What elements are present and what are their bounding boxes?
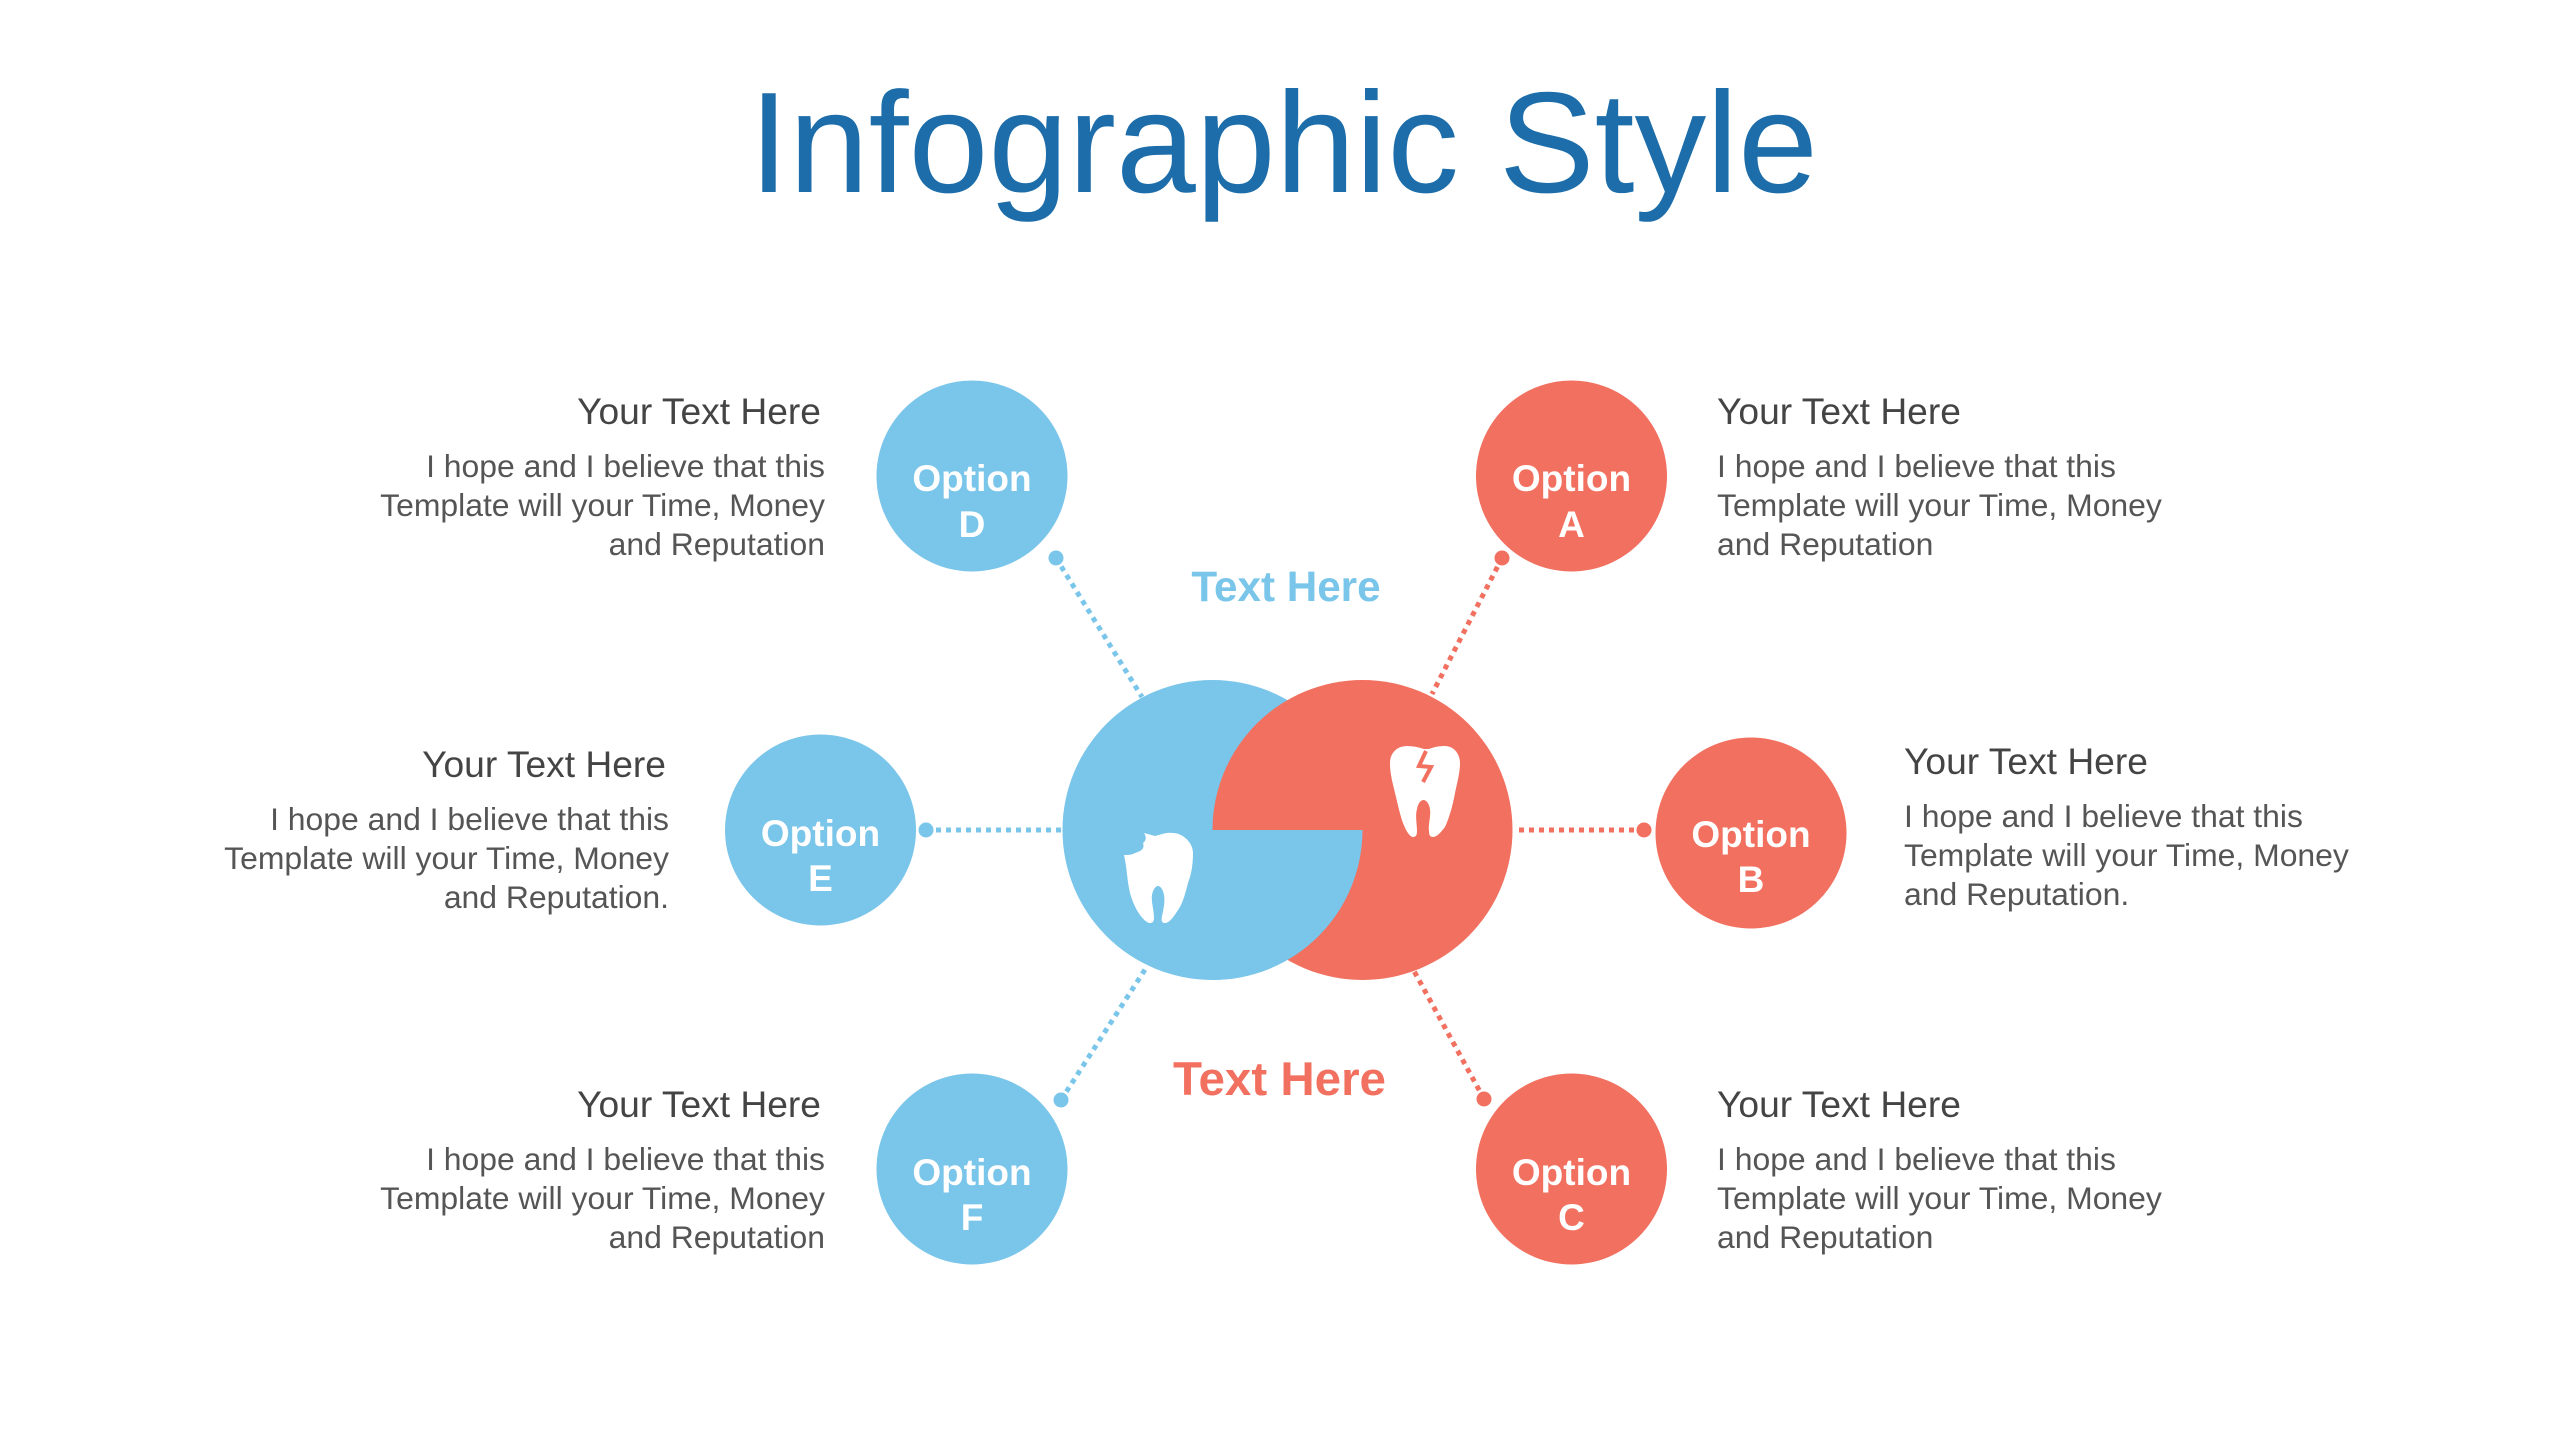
text block: option A: Template will your Time, Money <box>1717 487 2162 523</box>
text block: option B: Template will your Time, Money <box>1904 837 2349 873</box>
text block: option F: Your Text Here <box>577 1083 821 1125</box>
option F circle: Option <box>912 1152 1032 1193</box>
text block: option C: I hope and I believe that this <box>1717 1141 2116 1177</box>
option C circle <box>1476 1074 1667 1264</box>
text block: option F: I hope and I believe that this <box>426 1141 825 1177</box>
blue circle <box>1062 680 1362 980</box>
text block: option D: Template will your Time, Money <box>380 487 825 523</box>
option B circle: Option <box>1691 814 1811 855</box>
text block: option D: and Reputation <box>609 526 825 562</box>
option B circle: B <box>1738 859 1764 900</box>
label: blue text here: Text Here <box>1191 563 1381 610</box>
option B circle <box>1656 738 1846 928</box>
text block: option D <box>380 390 825 562</box>
option E circle <box>725 734 916 926</box>
text block: option C: Your Text Here <box>1717 1083 1961 1125</box>
option C circle: C <box>1558 1197 1585 1238</box>
option A circle: A <box>1558 504 1585 545</box>
text block: option A: and Reputation <box>1717 526 1933 562</box>
text block: option F: and Reputation <box>609 1219 825 1255</box>
text block: option E: I hope and I believe that this <box>270 801 669 837</box>
option D circle <box>876 380 1068 572</box>
option E circle: Option <box>761 813 880 854</box>
red circle <box>1212 680 1512 980</box>
text block: option A <box>1717 390 2162 562</box>
text block: option D: I hope and I believe that this <box>426 448 825 484</box>
option F circle: F <box>961 1197 983 1238</box>
option A circle <box>1476 380 1667 572</box>
central interlocking circles <box>1062 680 1512 980</box>
option A circle: Option <box>1512 458 1631 499</box>
option F circle <box>876 1074 1068 1264</box>
option D circle: Option <box>912 458 1032 499</box>
option D circle: D <box>959 504 985 545</box>
text block: option B: I hope and I believe that this <box>1904 798 2303 834</box>
text block: option E: Template will your Time, Money <box>224 840 669 876</box>
icon: cracked tooth <box>1390 746 1460 837</box>
text block: option F: Template will your Time, Money <box>380 1180 825 1216</box>
blue quadrant overlap <box>1212 830 1362 980</box>
text block: option B: and Reputation. <box>1904 876 2129 912</box>
connector: Option F <box>1054 968 1146 1108</box>
text block: option D: Your Text Here <box>577 390 821 432</box>
connector: Option D <box>1048 550 1142 697</box>
text block: option C: and Reputation <box>1717 1219 1933 1255</box>
connector: Option B <box>1514 822 1652 838</box>
icon: chipped tooth <box>1124 833 1193 923</box>
text block: option C <box>1717 1083 2162 1255</box>
connector: Option A <box>1432 550 1510 694</box>
option C circle: Option <box>1512 1152 1631 1193</box>
text block: option E <box>224 743 669 915</box>
label: red text here: Text Here <box>1173 1053 1386 1106</box>
text block: option F <box>380 1083 825 1255</box>
text block: option B <box>1904 740 2349 912</box>
text block: option A: Your Text Here <box>1717 390 1961 432</box>
title: Infographic Style <box>749 63 1818 223</box>
connector: Option C <box>1414 971 1492 1106</box>
text block: option C: Template will your Time, Money <box>1717 1180 2162 1216</box>
text block: option B: Your Text Here <box>1904 740 2148 782</box>
text block: option E: Your Text Here <box>422 743 666 785</box>
text block: option E: and Reputation. <box>444 879 669 915</box>
text block: option A: I hope and I believe that this <box>1717 448 2116 484</box>
option E circle: E <box>808 858 833 899</box>
connector: Option E <box>918 822 1062 838</box>
